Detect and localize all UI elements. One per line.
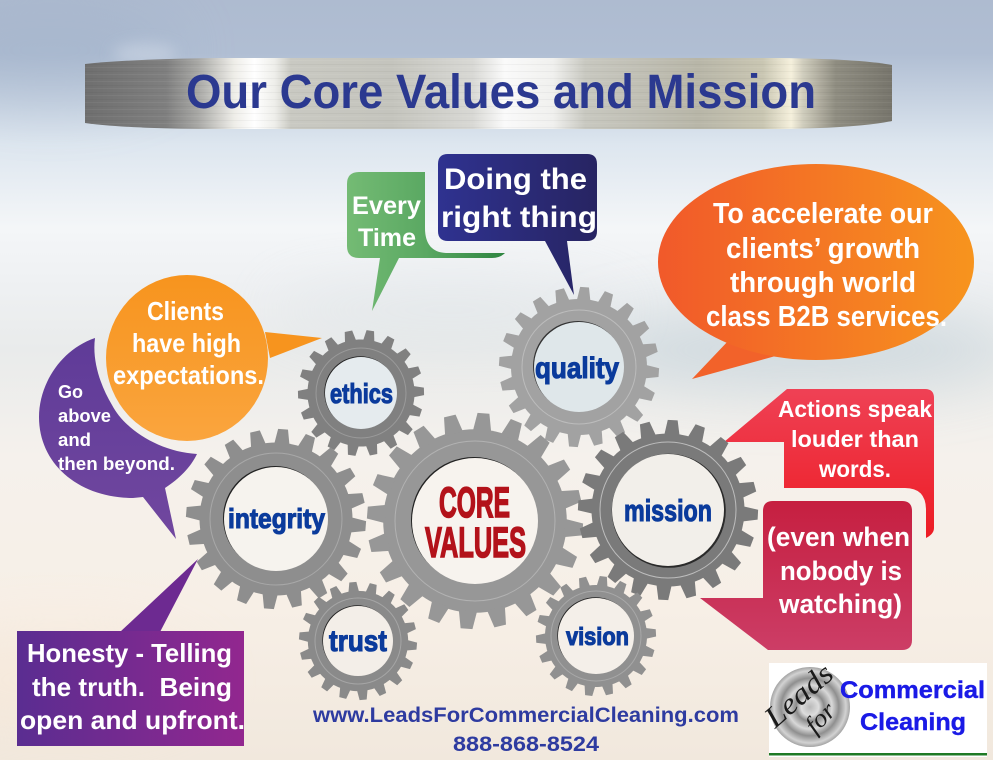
- logo: Commercial: [840, 677, 985, 704]
- bubble: honesty: open and upfront.: [20, 705, 245, 735]
- logo icon: metal disc: [770, 667, 850, 747]
- bubble: doing the right thing: right thing: [441, 201, 597, 234]
- bubble: even when nobody is watching: watching): [778, 589, 902, 619]
- bubble: clients have high expectations: [106, 275, 322, 441]
- bubble: go above and beyond: and: [58, 430, 91, 450]
- gear: trust: [280, 569, 436, 713]
- gear labels: quality: [535, 352, 619, 385]
- bubble: every time: [347, 172, 505, 311]
- gear labels: trust: [329, 625, 387, 658]
- bubble: go above and beyond: above: [58, 406, 111, 426]
- bubble: doing the right thing: [438, 154, 597, 295]
- title text: Our Core Values and Mission: [186, 66, 816, 119]
- bubble: clients have high expectations: Clients: [147, 296, 224, 326]
- bubble: even when nobody is watching: nobody is: [780, 556, 902, 586]
- bubble: go above and beyond: then beyond.: [58, 454, 175, 474]
- bubble: even when nobody is watching: [700, 501, 912, 650]
- bubble: even when nobody is watching: (even when: [767, 522, 910, 552]
- bubble: mission statement: clients’ growth: [726, 233, 920, 265]
- logo: Leads: [757, 657, 840, 735]
- gear labels: integrity: [228, 503, 325, 534]
- bubble: mission statement: class B2B services.: [706, 301, 947, 333]
- website and phone: [312, 704, 739, 756]
- bubble: mission statement: through world: [730, 267, 916, 299]
- bubble: honesty: [17, 559, 245, 746]
- gear: integrity: [179, 422, 373, 616]
- gear labels: vision: [566, 623, 629, 651]
- gear labels: ethics: [330, 378, 393, 409]
- bubble: actions speak louder: words.: [818, 456, 891, 482]
- gear: mission: [573, 415, 763, 605]
- gear labels: VALUES: [425, 519, 526, 567]
- bubble: honesty: the truth. Being: [32, 672, 232, 702]
- bubble: go above and beyond: Go: [58, 382, 83, 402]
- website and phone: 888-868-8524: [453, 733, 599, 756]
- gear labels: [228, 352, 712, 658]
- bubble: actions speak louder: louder than: [791, 426, 919, 452]
- logo: [757, 657, 987, 757]
- gear: quality: [494, 282, 664, 452]
- gear: ethics: [274, 312, 448, 474]
- title banner: [85, 58, 892, 129]
- gear: core values: [359, 405, 591, 637]
- bubble: actions speak louder: [724, 389, 934, 538]
- bubble: doing the right thing: Doing the: [444, 163, 587, 196]
- bubble: honesty: Honesty - Telling: [27, 638, 232, 668]
- website and phone: www.LeadsForCommercialCleaning.com: [312, 704, 739, 727]
- logo: Cleaning: [860, 709, 966, 736]
- bubble: clients have high expectations: have high: [132, 328, 241, 358]
- bubble: actions speak louder: Actions speak: [778, 396, 932, 422]
- gear: vision: [515, 561, 677, 711]
- bubble: every time: Every: [352, 192, 421, 220]
- bubble: mission statement: To accelerate our: [713, 198, 933, 230]
- bubble: every time: Time: [358, 224, 416, 252]
- bubble: go above and beyond: [39, 338, 197, 539]
- bubble: mission statement: [658, 164, 974, 379]
- gear labels: mission: [624, 493, 712, 528]
- logo: for: [800, 697, 842, 739]
- gear labels: CORE: [439, 479, 510, 527]
- bubble: clients have high expectations: expectations.: [113, 360, 264, 390]
